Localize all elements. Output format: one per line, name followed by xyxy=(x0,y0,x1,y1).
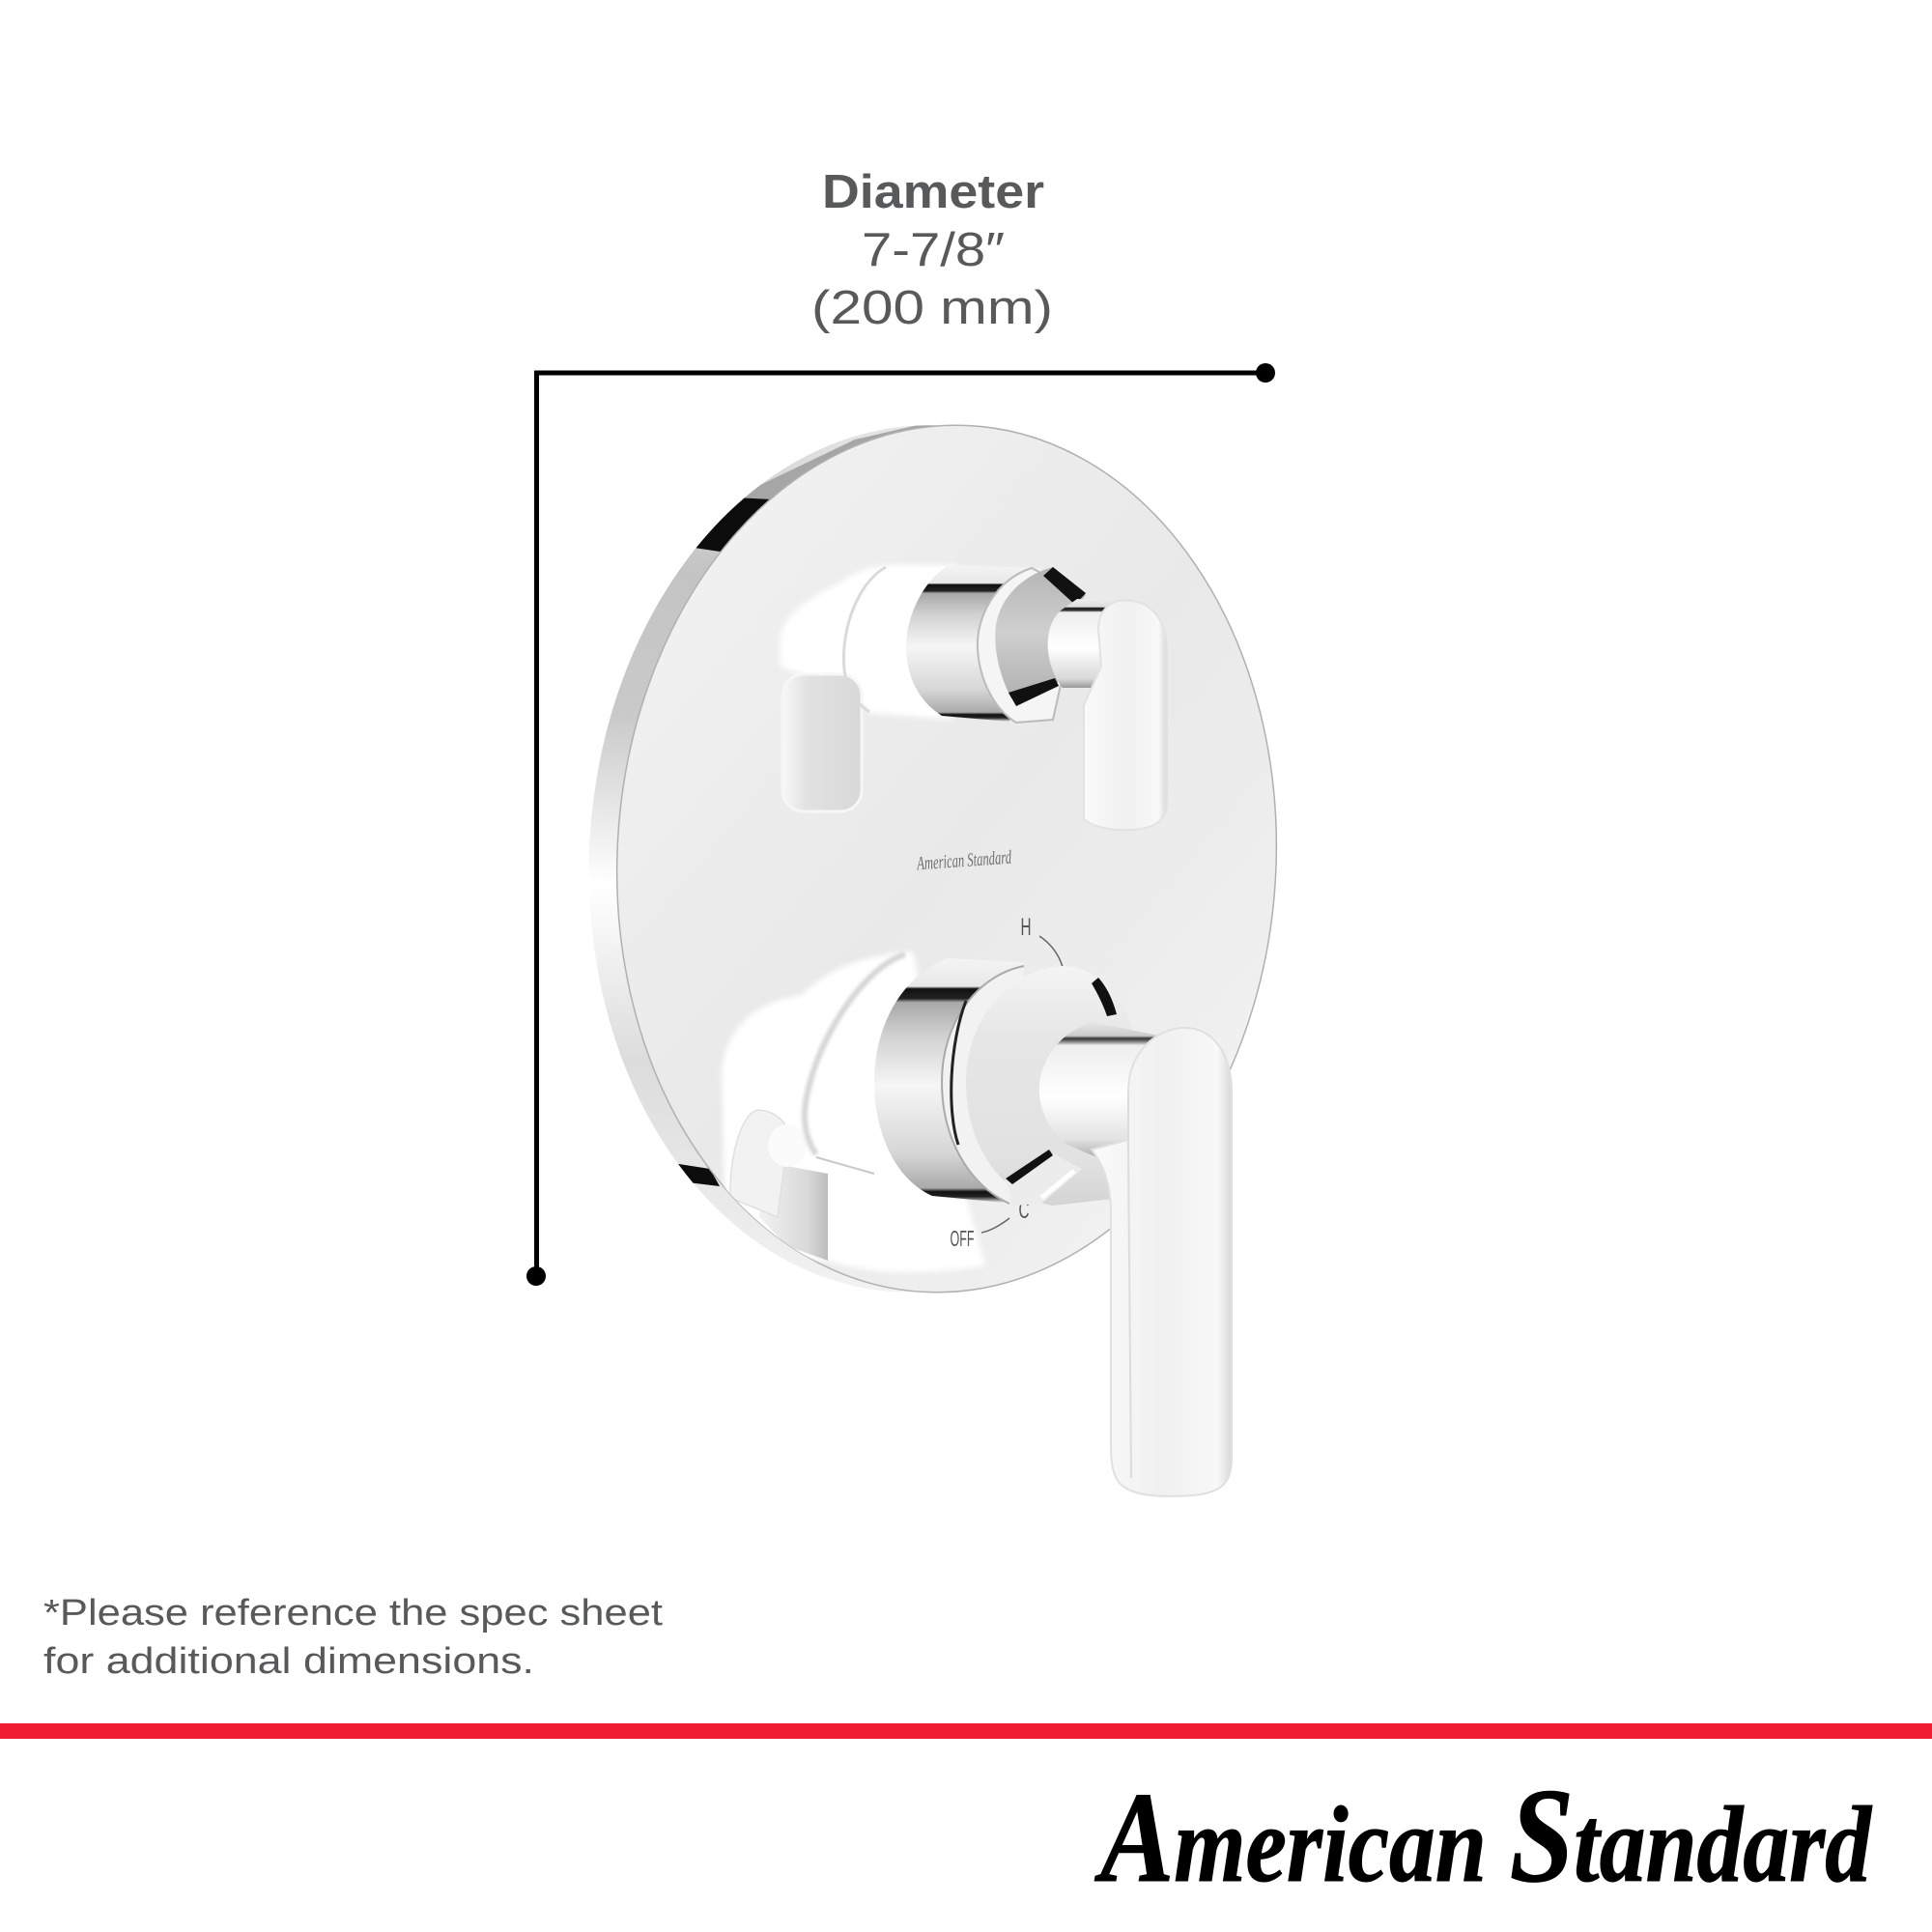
hot label xyxy=(1020,914,1063,967)
cold label: C xyxy=(1018,1197,1030,1224)
upper octagonal front xyxy=(978,567,1086,723)
American Standard logo: American Standard xyxy=(1094,1761,1873,1911)
upper lever xyxy=(1084,601,1167,830)
lower lever xyxy=(1092,1028,1232,1496)
dimension heading: (200 mm) xyxy=(811,282,1053,334)
upper chrome cylinder xyxy=(906,565,1041,722)
dimension heading: Diameter xyxy=(822,166,1044,218)
lower back reflection xyxy=(722,952,985,1272)
lower mixing handle xyxy=(722,952,1232,1496)
dimension heading: 7-7/8″ xyxy=(862,224,1005,276)
footnote xyxy=(43,1593,664,1682)
upper back reflection xyxy=(781,565,956,811)
off label xyxy=(951,1218,1009,1251)
red divider bar xyxy=(0,1723,1932,1739)
round trim plate xyxy=(567,409,1298,1309)
shower valve trim product xyxy=(567,409,1298,1496)
upper diverter handle xyxy=(781,565,1167,830)
off label: OFF xyxy=(951,1226,974,1251)
lower lever neck xyxy=(1039,1022,1159,1159)
lower front disc xyxy=(942,966,1136,1206)
dimension bracket line xyxy=(526,363,1275,1286)
dimension heading xyxy=(811,166,1053,334)
footnote: *Please reference the spec sheet xyxy=(43,1593,664,1634)
footnote: for additional dimensions. xyxy=(43,1641,534,1682)
small engraved logo: American Standard xyxy=(915,847,1012,874)
hot label: H xyxy=(1020,914,1032,941)
lower chrome cylinder xyxy=(874,958,1024,1203)
upper lever neck xyxy=(1048,599,1113,688)
